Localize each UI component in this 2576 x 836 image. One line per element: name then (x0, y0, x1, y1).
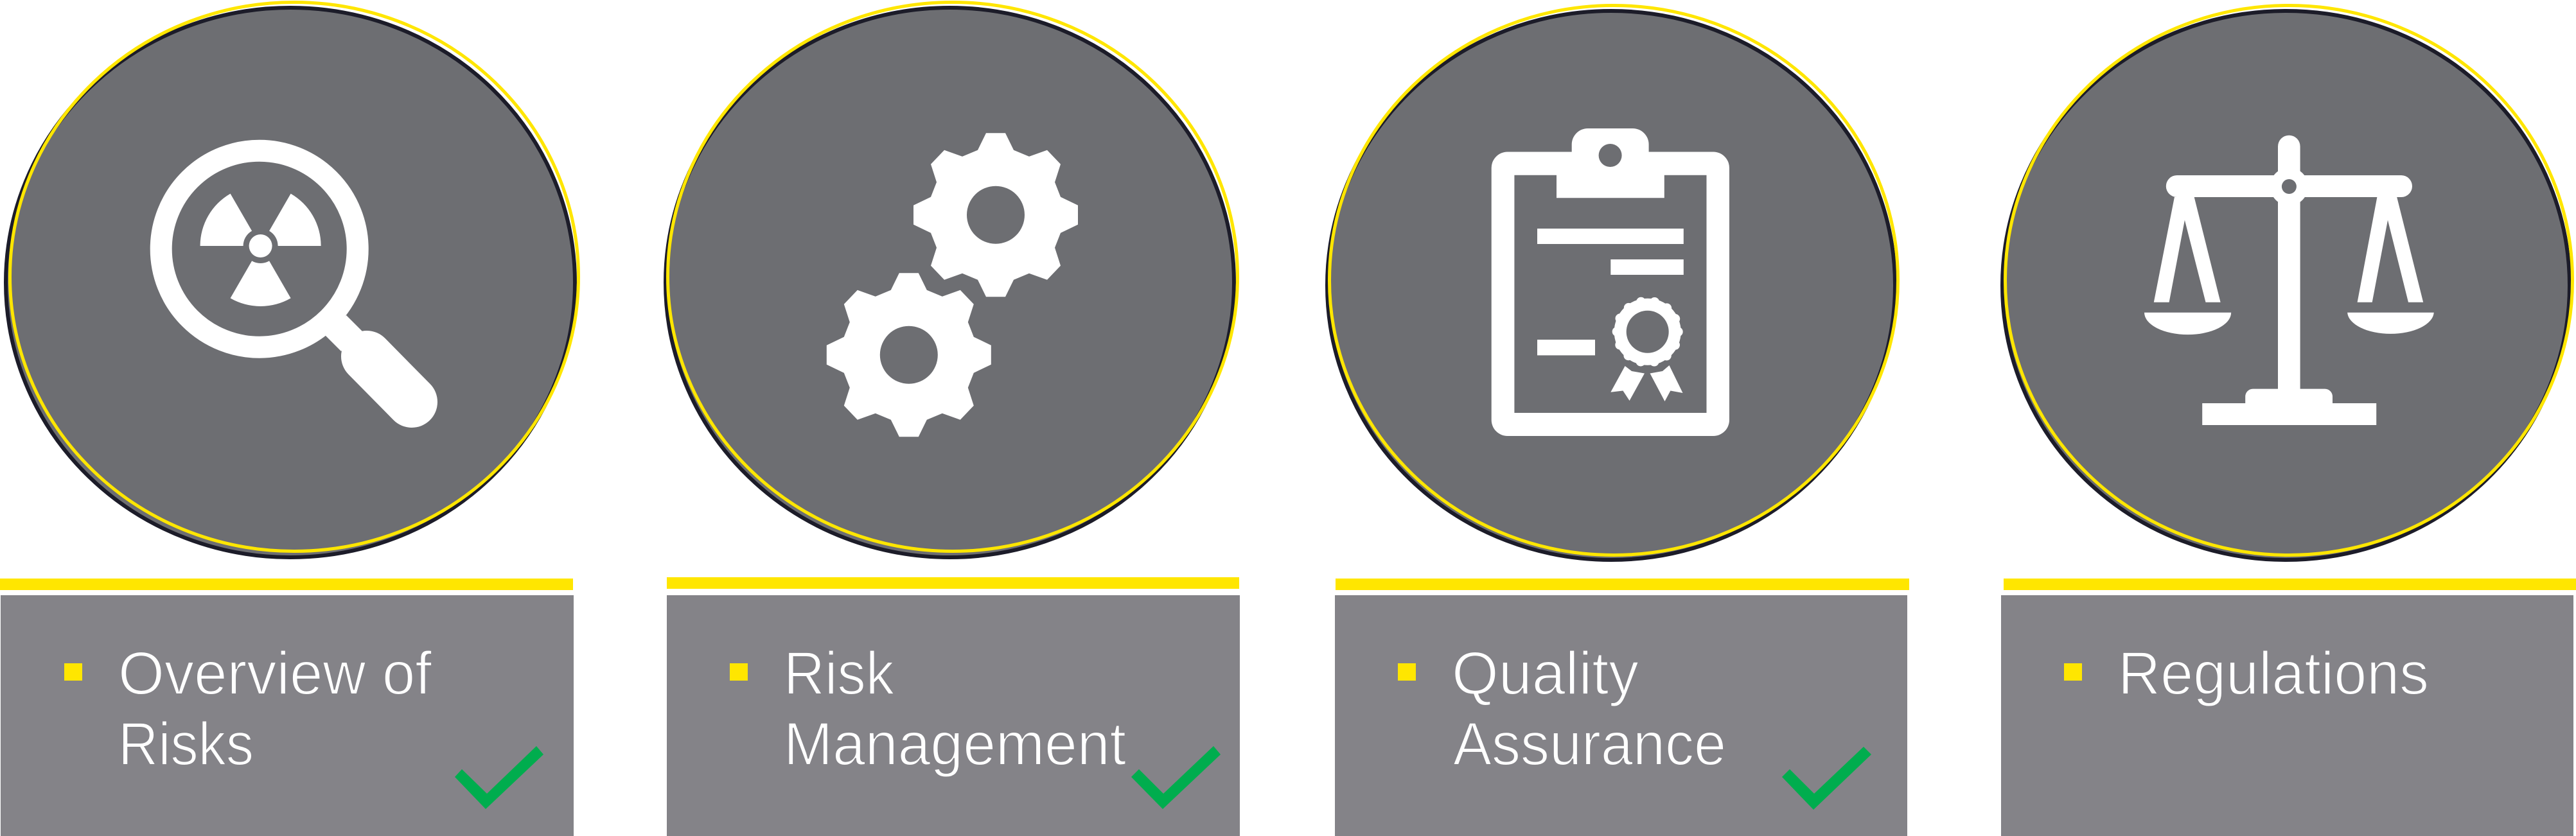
panel: risk management (666, 3, 1240, 836)
label: Risk Management: Risk (784, 640, 894, 708)
circle badge 2 (666, 3, 1237, 557)
label: Quality Assurance: Quality (1452, 640, 1639, 708)
icon: balance scales (2144, 135, 2434, 425)
panel: regulations (2001, 5, 2576, 836)
bullet 4 (2064, 663, 2082, 681)
circle badge 1 (6, 3, 578, 557)
circle badge 4 (2002, 5, 2572, 560)
icon: magnifier with radiation symbol (161, 151, 412, 402)
circle badge 3 (1327, 5, 1898, 560)
panel: quality assurance (1327, 5, 1909, 836)
yellow bar 4 (2004, 579, 2576, 590)
label: Risk Management (784, 640, 1126, 778)
label: Overview of Risks: Overview of (118, 640, 432, 708)
label: Risk Management: Management (784, 710, 1126, 778)
text panel 3 (1335, 595, 1907, 836)
text panel 1 (1, 595, 574, 836)
panel: overview of risks (0, 3, 578, 836)
icon: green check 3 (1782, 747, 1871, 810)
yellow bar 1 (0, 579, 573, 590)
bullet 3 (1398, 663, 1416, 681)
label: Regulations: Regulations (2118, 640, 2429, 708)
icon: green check 2 (1131, 746, 1221, 809)
label: Overview of Risks: Risks (118, 710, 254, 778)
label: Quality Assurance (1452, 640, 1726, 778)
bullet 2 (730, 663, 748, 681)
yellow bar 3 (1336, 579, 1909, 590)
icon: green check 1 (455, 746, 543, 809)
label: Overview of Risks (118, 640, 432, 778)
bullet 1 (64, 663, 82, 681)
text panel 2 (667, 595, 1240, 836)
icon: gears (827, 133, 1078, 437)
yellow bar 2 (667, 577, 1239, 589)
label: Quality Assurance: Assurance (1453, 710, 1726, 778)
icon: clipboard with certificate (1492, 128, 1729, 436)
text panel 4 (2001, 595, 2573, 836)
